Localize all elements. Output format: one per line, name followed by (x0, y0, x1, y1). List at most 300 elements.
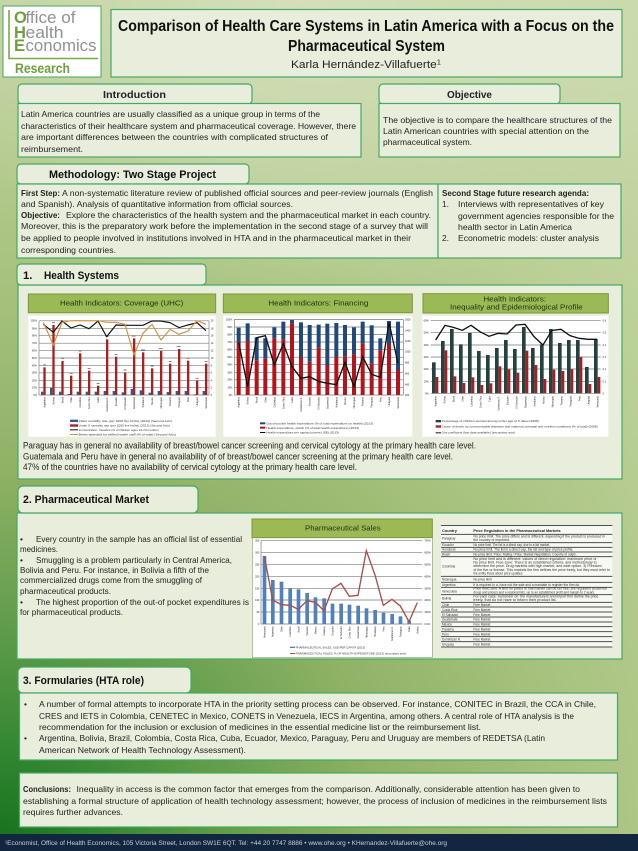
chart: financing: 400 (405, 383, 410, 386)
table: price regulation by country: No price limit. Price: Rating / Price. Market Negotiation. Country of origin. (473, 552, 577, 556)
table: price regulation by country: freely, that do not have to inform their product list. (473, 598, 557, 602)
chart: pharmaceutical sales: Colombia (289, 626, 292, 637)
chart: pharmaceutical sales: 200 (255, 575, 260, 578)
text: second stage: Second Stage future research agenda: (442, 188, 589, 198)
legend: financing: Health expenditure, public (% of total health expenditure) (2013) (266, 426, 359, 430)
table: price regulation by country: Free Market (473, 618, 490, 622)
chart: inequality and epidemiological profile: 0.3 (603, 356, 607, 359)
text: market bullets: • (20, 597, 23, 607)
table: price regulation by country: Free Market (473, 603, 490, 607)
chart: coverage UHC: Honduras (142, 396, 145, 408)
text: market bullets: medicines. (20, 544, 58, 554)
logo: Office of Health Economics Research: E (14, 37, 25, 55)
heading: Objective: Objective (447, 89, 492, 101)
heading: Methodology (17, 164, 249, 184)
chart: financing: Colombia (273, 396, 276, 407)
chart: pharmaceutical sales: 700% (424, 540, 431, 543)
chart: inequality and epidemiological profile: Peru (579, 395, 582, 401)
chart: coverage UHC: Dominican R. (106, 397, 109, 412)
chart: financing: Health Indicators: Financing (268, 301, 368, 308)
table: price regulation by country: Venezuela (442, 589, 457, 593)
text: first step: be applied to people involved in institutions involved in HTA and in the pharmaceutical market in their (21, 233, 411, 243)
chart: financing: 30% (227, 371, 233, 374)
chart: inequality and epidemiological profile: Honduras (534, 395, 537, 407)
chart: financing: 800 (405, 362, 410, 365)
chart: financing: Honduras (335, 396, 338, 408)
chart: financing: Argentina (238, 396, 241, 408)
title box: 1 (437, 60, 441, 66)
text: first step: A non-systematic literature review of published official sources and peer-review journals (English (62, 188, 433, 198)
logo: Office of Health Economics Research: H (14, 24, 26, 42)
panel: conclusions: Conclusions: (23, 784, 71, 794)
chart: coverage UHC: 2 (211, 387, 213, 390)
table: price regulation by country: Country (442, 529, 457, 533)
chart: inequality and epidemiological profile: 0.4 (603, 344, 607, 347)
logo: Office of Health Economics Research: O (14, 9, 27, 27)
chart: inequality and epidemiological profile: Paraguay (570, 395, 573, 407)
text: second stage: government agencies responsible for the (458, 211, 614, 221)
heading: 2. Pharmaceutical Market: 2. Pharmaceutical Market (23, 494, 149, 506)
chart: financing: 70% (227, 341, 233, 344)
chart: financing: Ecuador (309, 397, 312, 406)
chart: inequality and epidemiological profile: Inequality and Epidemiological Profile (450, 305, 583, 312)
table: price regulation by country: For each case: Surrender on: the manufacturers and import firm define the price (473, 594, 599, 598)
chart: coverage UHC: 60% (32, 350, 38, 353)
chart: coverage UHC: Argentina (43, 396, 46, 408)
table: price regulation by country: Argentina (442, 583, 456, 587)
legend: financing: Out-of-pocket health expenditure (% of total expenditure on health) (2013) (266, 422, 373, 426)
logo: Office of Health Economics Research: ealth (26, 24, 64, 42)
chart: coverage UHC: Bolivia (52, 396, 55, 404)
chart: coverage UHC: 0 (211, 394, 213, 397)
chart: financing: 0% (229, 394, 233, 397)
chart: pharmaceutical sales: Brazil (297, 626, 300, 633)
text: second stage: health sector in Latin America (458, 222, 572, 232)
chart: inequality and epidemiological profile: 0% (425, 392, 429, 395)
chart: financing: Nicaragua (353, 396, 356, 408)
chart: coverage UHC: Brazil (61, 397, 64, 403)
chart: coverage UHC: 20% (32, 379, 38, 382)
chart: coverage UHC: Chile (70, 396, 73, 403)
text: objective body: The objective is to compare the healthcare structures of the (383, 115, 612, 125)
chart: pharmaceutical sales: Bolivia (416, 626, 419, 634)
table: price regulation by country: Free Market (473, 608, 490, 612)
chart: inequality and epidemiological profile: 20% (424, 368, 429, 371)
table: price regulation by country: No price limit (473, 578, 492, 582)
heading: 2. Pharmaceutical Market (18, 486, 198, 513)
chart: inequality and epidemiological profile: 10% (424, 380, 429, 383)
text: market bullets: for pharmaceutical products. (20, 607, 123, 617)
chart: financing: 600 (405, 372, 410, 375)
chart: financing: Bolivia (247, 396, 250, 404)
chart: pharmaceutical sales: Guatemala (357, 626, 360, 638)
chart: financing: Panama (362, 396, 365, 406)
chart: coverage UHC: Cuba (97, 396, 100, 403)
text: first step (17, 184, 438, 258)
chart: coverage UHC: Guatemala (133, 396, 136, 409)
chart: inequality and epidemiological profile: Ecuador (507, 396, 510, 405)
panel: conclusions: Inequality in access is the common factor that emerges from the comparison. Additionally, considerable attention has been given to (76, 784, 580, 794)
chart: pharmaceutical sales: 0.0% (424, 623, 431, 626)
text: HTA bullets: CRES and IETS in Colombia, CENETEC in Mexico, CONETS in Venezuela, IECS in Argentina, among others. A central role of HTA analysis is the (39, 711, 574, 721)
chart: pharmaceutical sales: Costa Rica (348, 626, 351, 638)
chart: pharmaceutical sales: 350 (255, 540, 260, 543)
chart: pharmaceutical sales: Argentina (272, 626, 275, 637)
panel: 3. Formularies (18, 667, 618, 760)
text: HTA bullets: • (24, 699, 27, 709)
legend: inequality: Percentage of children stunted among under age of 5 (latest 2008) (442, 419, 539, 423)
chart: financing: 1000 (405, 351, 411, 354)
chart: financing: 60% (227, 349, 233, 352)
chart: coverage UHC: Colombia (79, 396, 82, 407)
text: cancer screening and cytology availability: Guatemala and Peru have in general no availability of of breast/bowel cancer screening at the primary health care level. (23, 452, 453, 462)
chart: financing: 10% (227, 386, 233, 389)
text: introduction body: are important differences between the countries with complicated structures of (21, 132, 329, 142)
text: cancer screening and cytology availability: Paraguay has in general no availability of breast/bowel cancer screening and cervical cytology at the primary health care level. (23, 440, 476, 450)
text: second stage: 2. (442, 233, 449, 243)
chart: inequality and epidemiological profile: 0.1 (603, 380, 607, 383)
legend: coverage: Births attended by skilled health staff (% of total) (Second Axis) (79, 432, 176, 436)
table: price regulation by country: Price fixed zero. A limit for prices of that market can be set free, are regulated (essential (473, 587, 607, 591)
chart: pharmaceutical sales: 50 (257, 611, 260, 614)
chart: pharmaceutical sales: 400% (424, 575, 431, 578)
table: price regulation by country: Brazil (442, 552, 450, 556)
legend: pharmaceutical sales (290, 645, 406, 656)
text: cancer screening and cytology availability (23, 440, 476, 472)
heading: 1. Health Systems: Health Systems (44, 270, 119, 282)
chart: coverage UHC: Nicaragua (160, 396, 163, 408)
footer (0, 834, 638, 851)
chart: pharmaceutical sales: Chile (280, 626, 283, 632)
chart: pharmaceutical sales: Honduras (374, 626, 377, 637)
legend: inequality: Gini coefficient (last data available) (secondary axis) (442, 431, 515, 435)
chart: coverage UHC: 6 (211, 372, 213, 375)
chart: coverage UHC: Venezuela (205, 396, 208, 409)
chart: pharmaceutical sales: Mexico (314, 626, 317, 634)
text: market bullets: Smuggling is a problem particularly in Central America, (36, 555, 232, 565)
chart: financing: 40% (227, 364, 233, 367)
text: objective body: pharmaceutical system. (383, 137, 472, 147)
text: first step: First Step: (21, 188, 60, 198)
chart: financing: 1600 (405, 319, 411, 322)
heading: 3. Formularies: 3. Formularies (HTA role) (23, 675, 144, 687)
table: price regulation by country: Bolivia (442, 597, 452, 601)
chart: financing: Paraguay (371, 396, 374, 408)
table: price regulation by country: Mexico (442, 623, 452, 627)
chart: pharmaceutical sales: 500% (424, 564, 431, 567)
legend: coverage: Under 5 mortality rate (per 1000 live births) (2013) (Second Axis) (79, 424, 170, 428)
chart: coverage UHC: 10 (211, 357, 214, 360)
text: second stage: 1. (442, 199, 449, 209)
chart: coverage UHC: 12 (211, 350, 214, 353)
chart: financing: 80% (227, 333, 233, 336)
legend: financing (260, 422, 373, 434)
chart: pharmaceutical sales: 600% (424, 552, 431, 555)
text: market bullets: Bolivia and Peru. For instance, in Bolivia a fifth of the (20, 565, 209, 575)
heading: Introduction: Introduction (103, 89, 166, 101)
chart: pharmaceutical sales: 300% (424, 587, 431, 590)
text: first step: and Spanish). Analysis of quantitative information from official sources. (21, 199, 293, 209)
table: price regulation by country: of the five or license. This markets the firm defines the price freely, but they must refer to (473, 568, 610, 572)
text: market bullets: • (20, 534, 23, 544)
chart: coverage UHC: 4 (211, 379, 213, 382)
table: price regulation by country: Free Market (473, 613, 490, 617)
chart: pharmaceutical sales: Pharmaceutical Sales (305, 526, 381, 533)
text: second stage: Interviews with representatives of key (458, 199, 605, 209)
legend: pharmaceutical sales: PHARMACEUTICAL SALES, USD PER CAPITA (2013) (296, 645, 365, 649)
chart: coverage UHC: 50% (32, 357, 38, 360)
chart: inequality and epidemiological profile: Panama (561, 395, 564, 405)
chart: pharmaceutical sales: El Salvador (340, 626, 343, 639)
legend: pharmaceutical sales: PHARMACEUTICAL SALES, % OF HEALTH EXPENDITURE (2013) (secondary axis) (296, 652, 406, 656)
text: first step: corresponding countries. (21, 245, 116, 255)
chart: inequality and epidemiological profile: Costa Rica (480, 395, 483, 408)
text: first step: Explore the characteristics of the health system and the pharmaceutical market in each country. (66, 210, 431, 220)
chart: financing: Costa Rica (282, 396, 285, 409)
text: market bullets (20, 534, 249, 617)
text: second stage (438, 184, 621, 258)
text: introduction body: reimbursement. (21, 144, 83, 154)
chart: coverage UHC: 80% (32, 335, 38, 338)
text: HTA bullets: American Network of Health Technology Assessment). (39, 745, 246, 755)
table: price regulation by country: No price limit. Free zone: There is an established criteria, and methodology to (473, 560, 597, 564)
table: price regulation by country: Free Market (473, 632, 490, 636)
chart: pharmaceutical sales: Cuba (408, 626, 411, 632)
chart: inequality and epidemiological profile: 40% (424, 344, 429, 347)
footer: ¹Economist, Office of Health Economics, 105 Victoria Street, London SW1E 6QT. Tel: +44 20 7747 8886 • www.ohe.org • KHernandez-Villafuerte@ohe.org (5, 840, 447, 847)
chart: inequality and epidemiological profile: Argentina (435, 395, 438, 407)
legend: coverage: Infant mortality rate (per 1000 live births) (2013) (Second Axis) (79, 419, 172, 423)
chart: financing: Chile (264, 396, 267, 403)
legend: financing: Health expenditure per capita (current US$) (2013) (266, 430, 339, 434)
text: introduction body (18, 104, 361, 157)
panel: 1. Health Systems (17, 264, 622, 479)
chart: financing: Guatemala (326, 396, 329, 409)
chart: financing: 1200 (405, 340, 411, 343)
text: HTA bullets: A number of formal attempts to incorporate HTA in the priority setting process can be observed. For instance, CONITEC in Brazil, the CCA in Chile, (39, 699, 596, 709)
chart: coverage UHC: 20 (211, 320, 214, 323)
chart: financing (223, 294, 412, 437)
chart: coverage UHC: 0% (33, 394, 38, 397)
chart: financing: El Salvador (318, 397, 321, 410)
chart: inequality and epidemiological profile: Uruguay (588, 395, 591, 405)
chart: financing: Venezuela (397, 396, 400, 409)
chart: coverage UHC: 70% (32, 342, 38, 345)
table: price regulation by country: Costa Rica (442, 608, 458, 612)
chart: financing: Brazil (256, 397, 259, 403)
table: price regulation by country: El Salvador (442, 613, 458, 617)
text: second stage: Econometric models: cluster analysis (458, 233, 599, 243)
chart: pharmaceutical sales: Uruguay (323, 626, 326, 636)
text: market bullets: pharmaceutical products. (20, 586, 111, 596)
chart: coverage UHC: El Salvador (124, 397, 127, 410)
panel: conclusions: requires further advances. (23, 807, 123, 817)
chart: pharmaceutical sales: 150 (255, 587, 260, 590)
chart: pharmaceutical sales: 0 (258, 623, 260, 626)
chart: coverage UHC: Paraguay (178, 396, 181, 408)
chart: financing: Dominican R. (300, 397, 303, 412)
chart: inequality and epidemiological profile: Bolivia (444, 395, 447, 403)
chart: coverage UHC: Panama (169, 396, 172, 406)
text: introduction body: Latin America countries are usually classified as a unique group in terms of the (21, 109, 320, 119)
text: HTA bullets: Argentina, Bolivia, Brazil, Colombia, Costa Rica, Cuba, Ecuador, Mexico, Paraguay, Peru and Uruguay are members of REDETSA (Latin (39, 733, 545, 743)
chart: coverage UHC: Costa Rica (88, 396, 91, 409)
legend: coverage: Immunization, measles (% of children ages 12-23 months) (79, 428, 159, 432)
title box (111, 10, 622, 77)
title box: Pharmaceutical System (288, 38, 445, 55)
chart: pharmaceutical sales: 200% (424, 599, 431, 602)
chart: financing: Cuba (291, 396, 294, 403)
chart: pharmaceutical sales: Panama (306, 626, 309, 636)
chart: coverage UHC: 14 (211, 342, 214, 345)
chart: inequality and epidemiological profile: Venezuela (597, 395, 600, 408)
table: price regulation by country: the country or imported. (473, 538, 510, 542)
text: market bullets: Every country in the sample has an official list of essential (36, 534, 242, 544)
logo: Office of Health Economics Research: conomics (26, 37, 96, 55)
text: introduction body: characteristics of their healthcare system and pharmaceutical coverage. However, there (21, 121, 356, 131)
table: price regulation by country: No price limit. The list is a direct cap, the list and type of price profile. (473, 548, 573, 552)
chart: coverage UHC: Ecuador (115, 397, 118, 406)
chart: pharmaceutical sales: Ecuador (331, 626, 334, 636)
chart: financing: Mexico (344, 396, 347, 405)
chart: coverage UHC: 30% (32, 372, 38, 375)
table: price regulation by country: No price limit and is different: values of direct regulation: maximum price or (473, 557, 597, 561)
logo: Office of Health Economics Research (3, 6, 101, 77)
table: price regulation by country: Colombia (442, 565, 456, 569)
chart: inequality and epidemiological profile: 0 (603, 392, 605, 395)
text: HTA bullets (20, 693, 618, 760)
table: price regulation by country: No price limit. The price differs and is different, depending if the product is produced in (473, 535, 605, 539)
text: first step: Objective: (21, 210, 60, 220)
chart: coverage UHC: 100% (31, 320, 38, 323)
chart: coverage UHC (28, 294, 216, 437)
panel: conclusions: establishing a formal structure of application of health technology assessment; however, the process of inclusion of medicines in the reimbursement lists (23, 796, 607, 806)
table: price regulation by country: It is required to a, have not the sale and a mandate to register the firm do. (473, 583, 580, 587)
chart: inequality and epidemiological profile: 60% (424, 320, 429, 323)
chart: inequality and epidemiological profile: Mexico (543, 395, 546, 404)
chart: inequality and epidemiological profile: Health Indicators: (483, 297, 546, 304)
chart: inequality and epidemiological profile: Chile (462, 395, 465, 402)
table: price regulation by country: Honduras (442, 548, 456, 552)
heading: Objective (379, 84, 560, 104)
chart: coverage UHC: Health Indicators: Coverage (UHC) (60, 301, 183, 308)
chart: coverage UHC: 8 (211, 364, 213, 367)
heading: Introduction (18, 84, 252, 104)
table: price regulation by country (441, 525, 612, 647)
table: price regulation by country: Chile (442, 603, 449, 607)
logo: Office of Health Economics Research: Research (15, 61, 70, 76)
text: market bullets: commercialized drugs come from the smuggling of (20, 575, 203, 585)
panel: 2. Pharmaceutical Market (17, 486, 622, 659)
chart: inequality and epidemiological profile: Guatemala (525, 395, 528, 408)
legend: inequality (436, 419, 598, 435)
table: price regulation by country: Dominican R. (442, 637, 461, 641)
heading: Methodology: Methodology: Two Stage Project (49, 169, 216, 181)
chart: coverage UHC: Uruguay (196, 396, 199, 406)
chart: inequality and epidemiological profile: 0.2 (603, 368, 607, 371)
table: price regulation by country: No price limit. The list is a direct cap, due to a list market. (473, 543, 550, 547)
chart: pharmaceutical sales: 250 (255, 564, 260, 567)
chart: inequality and epidemiological profile: Colombia (471, 395, 474, 406)
chart: financing: 1400 (405, 330, 411, 333)
chart: pharmaceutical sales: Venezuela (263, 626, 266, 638)
text: first step: Moreover, this is the preparatory work before the implementation in the second stage of a survey that will (21, 221, 428, 231)
title box: Karla Hernández-Villafuerte (291, 59, 426, 71)
chart: coverage UHC: 18 (211, 327, 214, 330)
chart: pharmaceutical sales: 100 (255, 599, 260, 602)
chart: pharmaceutical sales: Dominican R. (391, 626, 394, 641)
chart: coverage UHC: Peru (187, 396, 190, 402)
chart: inequality and epidemiological profile: Cuba (489, 395, 492, 402)
legend: coverage (70, 419, 176, 436)
chart: inequality and epidemiological profile: 50% (424, 332, 429, 335)
chart: financing: 100% (226, 319, 233, 322)
table: price regulation by country: Paraguay (442, 536, 456, 540)
chart: inequality and epidemiological profile: Brazil (453, 396, 456, 402)
chart: pharmaceutical sales: Peru (382, 626, 385, 632)
chart: financing: 50% (227, 356, 233, 359)
text: objective body (379, 104, 620, 157)
chart: inequality and epidemiological profile (422, 294, 608, 437)
table: price regulation by country: Free Market (473, 623, 490, 627)
table: price regulation by country: Free Market (473, 637, 490, 641)
chart: inequality and epidemiological profile: 30% (424, 356, 429, 359)
chart: pharmaceutical sales: 300 (255, 552, 260, 555)
panel: objective (379, 84, 620, 157)
table: price regulation by country: Nicaragua (442, 578, 457, 582)
chart: financing: Peru (379, 396, 382, 402)
chart: financing: 200 (405, 394, 410, 397)
table: price regulation by country: Free Market (473, 643, 490, 647)
table: price regulation by country: Uruguay (442, 643, 454, 647)
table: price regulation by country: determine the price. Drug markets with high market, and wide option. 3) Freedom (473, 564, 602, 568)
table: price regulation by country: Guatemala (442, 618, 458, 622)
text: objective body: Latin American countries with special attention on the (383, 126, 589, 136)
heading: 1. Health Systems (17, 264, 206, 285)
chart: inequality and epidemiological profile: Nicaragua (552, 395, 555, 407)
text: HTA bullets: recommendation for the inclusion or exclusion of medicines in the essential medicine list or the reimbursement list. (39, 722, 481, 732)
chart: financing: 20% (227, 379, 233, 382)
chart: coverage UHC: Mexico (151, 396, 154, 405)
chart: pharmaceutical sales: Nicaragua (365, 626, 368, 638)
chart: inequality and epidemiological profile: El Salvador (516, 396, 519, 409)
table: price regulation by country: the entity those about price updates. (473, 572, 523, 576)
text: market bullets: The highest proportion of the out-of pocket expenditures is (36, 597, 249, 607)
table: price regulation by country: Price Regulation in the Pharmaceutical Markets (473, 529, 561, 533)
panel: introduction (18, 84, 361, 157)
chart: coverage UHC: 10% (32, 387, 38, 390)
table: price regulation by country: Panama (442, 627, 454, 631)
table: price regulation by country: Free Market (473, 627, 490, 631)
chart: coverage UHC: 40% (32, 364, 38, 367)
panel: methodology (17, 164, 621, 258)
chart: inequality and epidemiological profile: Dominican R. (498, 396, 501, 411)
chart: pharmaceutical sales: 100% (424, 611, 431, 614)
legend: inequality: Cause of death, by communicable diseases and maternal, prenatal and nutrition conditions (% of total) (2008) (442, 424, 598, 428)
table: price regulation by country: drugs and prices) and a regional lists, up to an established profit and margin to 2 years. (473, 590, 595, 594)
chart: pharmaceutical sales: Paraguay (399, 626, 402, 637)
chart: pharmaceutical sales (252, 519, 432, 658)
heading: 3. Formularies (18, 667, 191, 693)
chart: inequality and epidemiological profile: 0.6 (603, 320, 607, 323)
heading: 1. Health Systems: 1. (23, 270, 32, 282)
chart: financing: 90% (227, 326, 233, 329)
text: HTA bullets: • (24, 733, 27, 743)
panel: conclusions (20, 773, 618, 827)
chart: financing: Uruguay (388, 396, 391, 406)
text: market bullets: • (20, 555, 23, 565)
table: price regulation by country: Peru (442, 632, 449, 636)
